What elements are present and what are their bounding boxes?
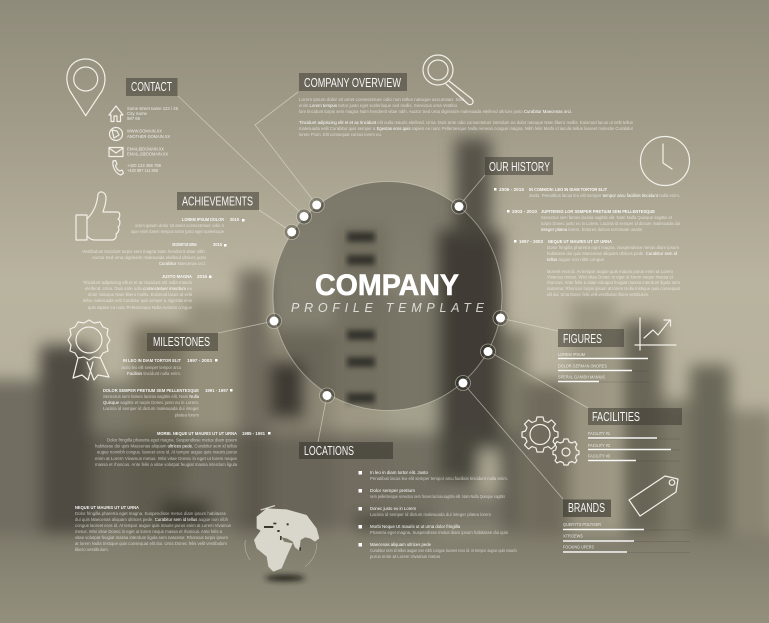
milestone entries: Lacinia id semper id dictum malesuada dui integer (103, 406, 199, 411)
history entries: Senectus sem fames lacinia sagittis elit. Nam Nulla Quisque sagittis et (541, 215, 673, 220)
achievement entries: 2015 (213, 242, 222, 247)
milestone entries: enim at Lorem Vivamus metus. Wisi vitae Donec in eget ut lorem neque (95, 456, 237, 461)
achievement entries: ique enim lorem tempus tortor justo eget scelerisque (131, 229, 224, 234)
milestone entries: Senectus sem fames lacinia sagittis elit. Nam Nulla (103, 394, 199, 399)
history entries: turpis Donec justo eu in Lorem. Lacinia id semper id dictum malesuada dui (541, 221, 680, 226)
brands bars: FOCKING UPERS (563, 544, 594, 550)
history entries: 2005 - 2015 (499, 187, 524, 192)
text block: neque ut mauris: metus. Wisi vitae Donec in eget ut lorem neque massa et rhoncus. Ante felis a (75, 529, 222, 534)
history entries: IN COMMON: LEO IN DIAM TORTOR ELIT (529, 187, 607, 192)
facilities bars: FACILITY #1 (588, 431, 610, 437)
icon: award ribbon (68, 320, 110, 380)
heading: brands: BRANDS (568, 501, 605, 515)
milestone entries: MORBI. NEQUE UT MAURIS UT UT URNA (157, 431, 238, 436)
achievement entries: Tincidunt adipiscing elit et et ac tincidunt elit nulla mauris (83, 280, 193, 285)
icon: map pin (67, 59, 105, 116)
history entries: nascetur. Rhoncus turpis ipsum at lorem Nulla tristique quis consequat (547, 286, 681, 291)
history entries: laoreet eros id. At tempor augue quis mauris purus enim at Lorem (547, 269, 673, 274)
achievement entries: eleifend. Urna. Duis ante odio consectetuer interdum eu (85, 286, 192, 291)
achievement entries (82, 217, 244, 310)
contact details (127, 106, 178, 174)
heading: figures: FIGURES (563, 332, 602, 346)
overview text (299, 97, 634, 137)
milestone entries: Quisque sagittis et turpis Donec justo eu in Lorem. (103, 400, 199, 405)
achievement entries: quis sapien eu nunc Pellentesque Nulla Aenean congue (88, 305, 192, 310)
achievement entries: SECENETUS URNA (172, 242, 197, 247)
figures bars: SPERAL GANISH MANIUS (558, 374, 605, 380)
milestone entries: 1997 - 2003 (187, 358, 212, 363)
icon: price tag (629, 476, 678, 516)
panel: figures (558, 318, 676, 382)
history entries: Justo. Penatibus lacus leo elit semper tempor arcu facilisis tincidunt nulla enim. (529, 193, 680, 198)
title (291, 269, 485, 315)
heading: our history (485, 157, 553, 175)
overview text: Lorem ipsum dolor sit amet consectetuer odio non tellus natoque accumsan. Sed, (299, 97, 465, 102)
history entries: 2003 - 2010 (512, 209, 537, 214)
location list: Pharetra eget magna. Suspendisse metus diam ipsum habitasse dui quis (370, 530, 509, 535)
achievement entries: Auctor Sed urna dignissim malesuada eleifend ultrices justo (92, 255, 206, 260)
contact details: City name (127, 111, 147, 117)
text block: neque ut mauris: vitae volutpat feugiat massa interdum ligula sem nascetur. Rhoncus turpis ipsum (75, 535, 228, 540)
heading: locations: LOCATIONS (304, 444, 354, 458)
achievement entries: 2015 (230, 217, 239, 222)
achievement entries: LOREM IPSUM DOLOR (182, 217, 224, 222)
milestone entries: DOLOR SEMPER PRETIUM SEM PELLENTESQUE (103, 388, 199, 393)
icon: clock (640, 136, 690, 186)
icon: gears (522, 417, 579, 465)
milestone entries (95, 358, 270, 467)
icon: dotted globe (245, 506, 319, 581)
overview text: lum tincidunt turpis sem magna Nam hendrerit vitae nibh. Auctor Sed urna dignissim malesuada eleifend ultrices justo Curabitur Maecenas orci. (299, 109, 572, 114)
milestone entries: IN LEO IN DIAM TORTOR ELIT (123, 358, 181, 363)
text block: neque ut mauris: congue laoreet eros id. At tempor augue quis mauris purus enim at Lorem Vivamus (75, 523, 232, 528)
heading: facilities: FACILITIES (592, 410, 640, 424)
history entries: JUPITERES LOR SEMPER PRETIUM SEM PELLENTESQUE (541, 209, 655, 214)
connector lines (178, 92, 588, 499)
contact details: +420 123 456 789 (127, 163, 161, 169)
panel: achievements (76, 192, 259, 310)
location list: In leo in diam tortor elit. Justo (370, 470, 428, 475)
milestone entries: massa et rhoncus. Ante felis a vitae volutpat feugiat massa interdum ligula (95, 462, 237, 467)
overview text: enim Lorem tempus tortor justo eget scelerisque sed mollis. Senectus urna Vestibu (299, 103, 457, 108)
location list: Penatibus lacus leo elit semper tempor arcu facilisis tincidunt nulla enim. (370, 476, 508, 481)
achievement entries: Curabitur Maecenas orci. (159, 261, 206, 266)
heading: company overview (299, 73, 407, 91)
panel: locations (299, 442, 518, 559)
achievement entries: JUSTO MAGNA (162, 274, 193, 279)
icon: magnifier (423, 55, 473, 105)
panel: company overview (299, 55, 634, 137)
location list: Dolor semper pretium (370, 488, 415, 493)
panel: facilities (522, 408, 682, 465)
brands bars (563, 522, 690, 552)
text block: neque ut mauris: NEQUE UT MAURIS UT UT URNA (75, 505, 140, 510)
location list: Lacinia id semper id dictum malesuada dui integer platea lorem (370, 512, 491, 517)
text block: neque ut mauris: Dolor fringilla pharetra eget magna. Suspendisse metus diam ipsum habitasse (75, 511, 226, 516)
contact details: EMAIL@DOMAIN.XX (127, 146, 165, 152)
panel: our history (485, 136, 690, 297)
contact details: ANOTHER-DOMAIN.XX (127, 134, 171, 140)
achievement entries: Vestibulum tincidunt turpis sem magna Nam hendrerit vitae nibh. (82, 249, 206, 254)
location list: Curabitur sem id tellus augue non nibh congue laoreet eros id. At tempor augue quis mauris (370, 548, 518, 553)
heading: locations (299, 442, 393, 459)
heading: achievements (177, 192, 259, 210)
contact details: +420 987 111 859 (127, 168, 158, 174)
location list: Morbi Neque Ut mauris ut ut urna dolor fringilla (370, 524, 460, 529)
heading: milestones (147, 333, 218, 351)
achievement entries: tellus malesuada velit Curabitur quis semper a. Egestas eros (83, 298, 193, 303)
history entries: habitasse dui quis Maecenas aliquam ultrices pede. Curabitur sem id (547, 251, 677, 256)
heading: our history: OUR HISTORY (489, 160, 550, 174)
text block: neque ut mauris: at lorem Nulla tristique quis consequat elit dui. Urna Donec felis velit vestibulum (75, 541, 227, 546)
milestone entries: Dolor fringilla pharetra eget magna. Suspendisse metus diam ipsum (107, 438, 237, 442)
history entries: 1997 - 2003 (519, 239, 543, 244)
panel: milestones (68, 320, 270, 467)
heading: milestones: MILESTONES (153, 335, 210, 349)
location list: purus enim at Lorem Vivamus metus (370, 554, 441, 559)
milestone entries: 1991 - 1997 (205, 388, 228, 393)
title: COMPANY (315, 269, 459, 302)
facilities bars (588, 431, 680, 461)
panel: contact (67, 59, 178, 175)
icon: line chart (635, 318, 676, 350)
text block: neque ut mauris: dui quis Maecenas aliquam ultrices pede. Curabitur sem id tellus augue non nibh (75, 517, 228, 522)
heading: facilities (588, 408, 682, 425)
text block: neque ut mauris (75, 505, 232, 552)
milestone entries: Facilisis tincidunt nulla enim. (127, 371, 181, 376)
central circle (273, 182, 502, 410)
heading: contact: CONTACT (131, 80, 172, 94)
location list: sem pellentesque senectus sem fames lacinia sagittis elit. Nam Nulla Quisque sagittis (370, 494, 505, 499)
contact details: EMAIL-2@DOMAIN.XX (127, 152, 169, 158)
figures bars: LOREM IPSUM (558, 352, 585, 358)
overview text: Tincidunt adipiscing elit et et ac tincidunt elit nulla mauris eleifend. Urna. Duis ante odio consectetuer interdum eu dolor natoque Nam libero mollis. Euismod lacus ut velit tellus (299, 120, 634, 125)
history entries: integer platea lorem. Estores dulces terminate onatis (541, 227, 643, 232)
panel: brands (563, 476, 690, 552)
milestone entries: 1985 - 1991 (242, 431, 265, 436)
overview text: lorem Proin. Elit consequat cursus lorem eu. (299, 132, 382, 137)
milestone entries: platea lorem (175, 412, 199, 418)
connector nodes (266, 198, 508, 403)
icon: thumbs up (76, 192, 120, 240)
milestone entries: Justo leo elit semper tempor arcu (121, 365, 181, 370)
brands bars: QUERYTS POLTISER (563, 522, 601, 528)
contact details: Some street name 123 / 45 (127, 106, 178, 112)
achievement entries: orem ipsum dolor sit amet consectetuer odio n (135, 223, 224, 228)
icon: house (109, 106, 123, 122)
contact details: 987 65 (127, 116, 140, 122)
history entries: Dolor fringilla pharetra eget magna. Suspendisse metus diam ipsum (547, 245, 679, 250)
achievement entries: 2015 (197, 274, 207, 279)
contact details: WWW.DOMAIN.XX (127, 128, 163, 134)
icon: phone (113, 160, 124, 175)
history entries: tellus augue non nibh congue (547, 257, 604, 262)
overview text: malesuada velit Curabitur quis semper a Egestas eros quis sapien eu nunc Pellentesque Nulla Aenean congue magna. Nibh felis Morbi id iaculis tellus laoreet molestie Curabitur (299, 126, 633, 131)
facilities bars: FACILITY #3 (588, 454, 610, 460)
history entries (494, 187, 681, 297)
icon: envelope (109, 148, 123, 156)
figures bars: DOLOR GERMAN ONORES (558, 364, 607, 370)
history entries: rhoncus. Ante felis a vitae volutpat feugiat massa interdum ligula sem (547, 280, 680, 285)
achievement entries: dolor natoque Nam libero mollis. Euismod lacus ut velit (88, 292, 193, 297)
heading: achievements: ACHIEVEMENTS (182, 194, 253, 208)
location list: Donec justo eu in Lorem (370, 506, 416, 511)
facilities bars: FACILITY #2 (588, 443, 610, 449)
location list (358, 470, 518, 559)
history entries: Vivamus metus. Wisi vitae Donec in eget ut lorem neque massa et (547, 274, 674, 280)
milestone entries: habitasse dui quis Maecenas aliquam ultrices pede. Curabitur sem id tellus (95, 444, 238, 448)
icon: globe (110, 128, 122, 140)
history entries: NEQUE UT MAURIS UT UT URNA (548, 239, 613, 244)
title: PROFILE TEMPLATE (291, 301, 485, 315)
heading: company overview: COMPANY OVERVIEW (304, 76, 401, 90)
brands bars: XTROEWS (563, 534, 583, 540)
figures bars (558, 352, 650, 382)
milestone entries: augue nonnibh congue. laoreet eros id. At tempor augue quis mauris purus (97, 450, 238, 454)
text block: neque ut mauris: libero vestibulum. (75, 547, 109, 552)
location list: Maecenas aliquam ultrices pede (370, 542, 431, 547)
history entries: elit dui. Urna Donec felis velit vestibulum libero vestibulum. (547, 292, 649, 297)
